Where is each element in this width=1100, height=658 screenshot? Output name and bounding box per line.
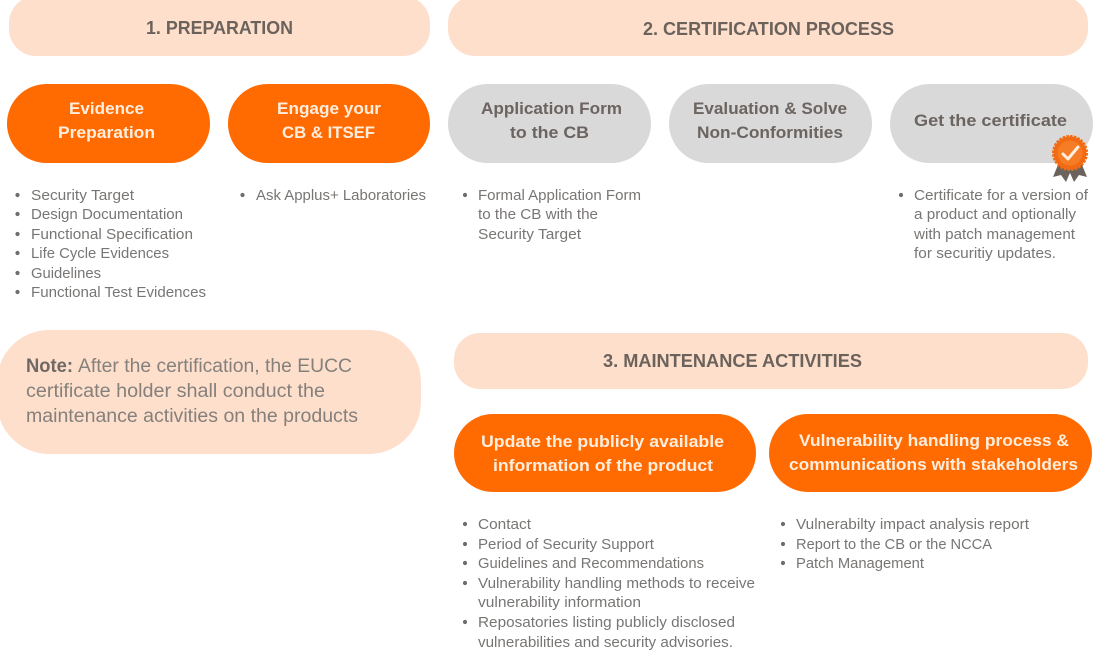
step: evidence preparation: [7, 84, 210, 163]
list: public information items: vulnerability information: [478, 595, 641, 611]
list: certificate items: a product and optionally: [914, 207, 1077, 223]
step: vulnerability handling: [769, 414, 1092, 492]
step: engage CB and ITSEF: CB & ITSEF: [282, 123, 375, 142]
step: vulnerability handling: communications with stakeholders: [789, 455, 1078, 474]
step: update public information: information of the product: [493, 456, 713, 475]
panel: 2. certification process header: 2. CERTIFICATION PROCESS: [643, 19, 894, 39]
list: engage CB items: Ask Applus+ Laboratories: [256, 188, 426, 204]
step: get the certificate: [890, 84, 1093, 163]
list: public information items: Contact: [478, 517, 531, 533]
list: certificate items: for securitiy updates.: [914, 246, 1056, 262]
callout: note: Note:: [26, 356, 73, 377]
list: public information items: Vulnerability handling methods to receive: [478, 576, 755, 592]
step: update public information: [454, 414, 756, 492]
list: public information items: vulnerabilities and security advisories.: [478, 635, 733, 651]
list: evidence preparation items: Functional Specification: [31, 227, 193, 243]
list: evidence preparation items: Security Target: [31, 188, 134, 204]
list: evidence preparation items: [15, 188, 206, 301]
list: public information items: Guidelines and Recommendations: [478, 556, 704, 572]
icon: certificate badge: [1053, 136, 1087, 182]
list: application form items: to the CB with the: [478, 207, 598, 223]
list: public information items: Reposatories listing publicly disclosed: [478, 615, 735, 631]
list: public information items: [463, 517, 755, 651]
list: public information items: Period of Security Support: [478, 537, 654, 553]
list: certificate items: [899, 188, 1089, 262]
step: application form: to the CB: [510, 123, 589, 142]
list: application form items: [463, 188, 641, 243]
list: vulnerability handling items: Report to the CB or the NCCA: [796, 537, 992, 553]
list: vulnerability handling items: Vulnerabilty impact analysis report: [796, 517, 1029, 533]
step: vulnerability handling: Vulnerability handling process &: [799, 431, 1069, 450]
list: evidence preparation items: Guidelines: [31, 266, 101, 282]
callout: note: certificate holder shall conduct the: [26, 381, 325, 402]
callout: note: [0, 330, 421, 454]
step: application form: [448, 84, 651, 163]
step: engage CB and ITSEF: [228, 84, 430, 163]
list: certificate items: with patch management: [913, 227, 1075, 243]
step: get the certificate: Get the certificate: [914, 111, 1067, 130]
list: application form items: Formal Application Form: [478, 188, 641, 204]
list: vulnerability handling items: Patch Management: [796, 556, 924, 572]
callout: note: maintenance activities on the products: [26, 406, 358, 427]
step: evaluation and non-conformities: Evaluation & Solve: [693, 99, 847, 118]
panel: 1. preparation header: 1. PREPARATION: [146, 18, 293, 38]
list: evidence preparation items: Design Documentation: [31, 207, 183, 223]
list: evidence preparation items: Life Cycle Evidences: [31, 246, 169, 262]
panel: 2. certification process header: [448, 0, 1088, 56]
list: vulnerability handling items: [781, 517, 1029, 572]
list: application form items: Security Target: [478, 227, 581, 243]
step: update public information: Update the publicly available: [481, 432, 724, 451]
step: evaluation and non-conformities: Non-Conformities: [697, 123, 843, 142]
callout: note: After the certification, the EUCC: [78, 356, 352, 377]
list: evidence preparation items: Functional Test Evidences: [31, 285, 206, 301]
step: evidence preparation: Evidence: [69, 99, 144, 118]
step: evaluation and non-conformities: [669, 84, 872, 163]
step: evidence preparation: Preparation: [58, 123, 155, 142]
panel: 3. maintenance activities header: [454, 333, 1088, 389]
list: certificate items: Certificate for a version of: [914, 188, 1089, 204]
panel: 1. preparation header: [9, 0, 430, 56]
step: engage CB and ITSEF: Engage your: [277, 99, 381, 118]
step: application form: Application Form: [481, 99, 622, 118]
panel: 3. maintenance activities header: 3. MAINTENANCE ACTIVITIES: [603, 351, 862, 371]
